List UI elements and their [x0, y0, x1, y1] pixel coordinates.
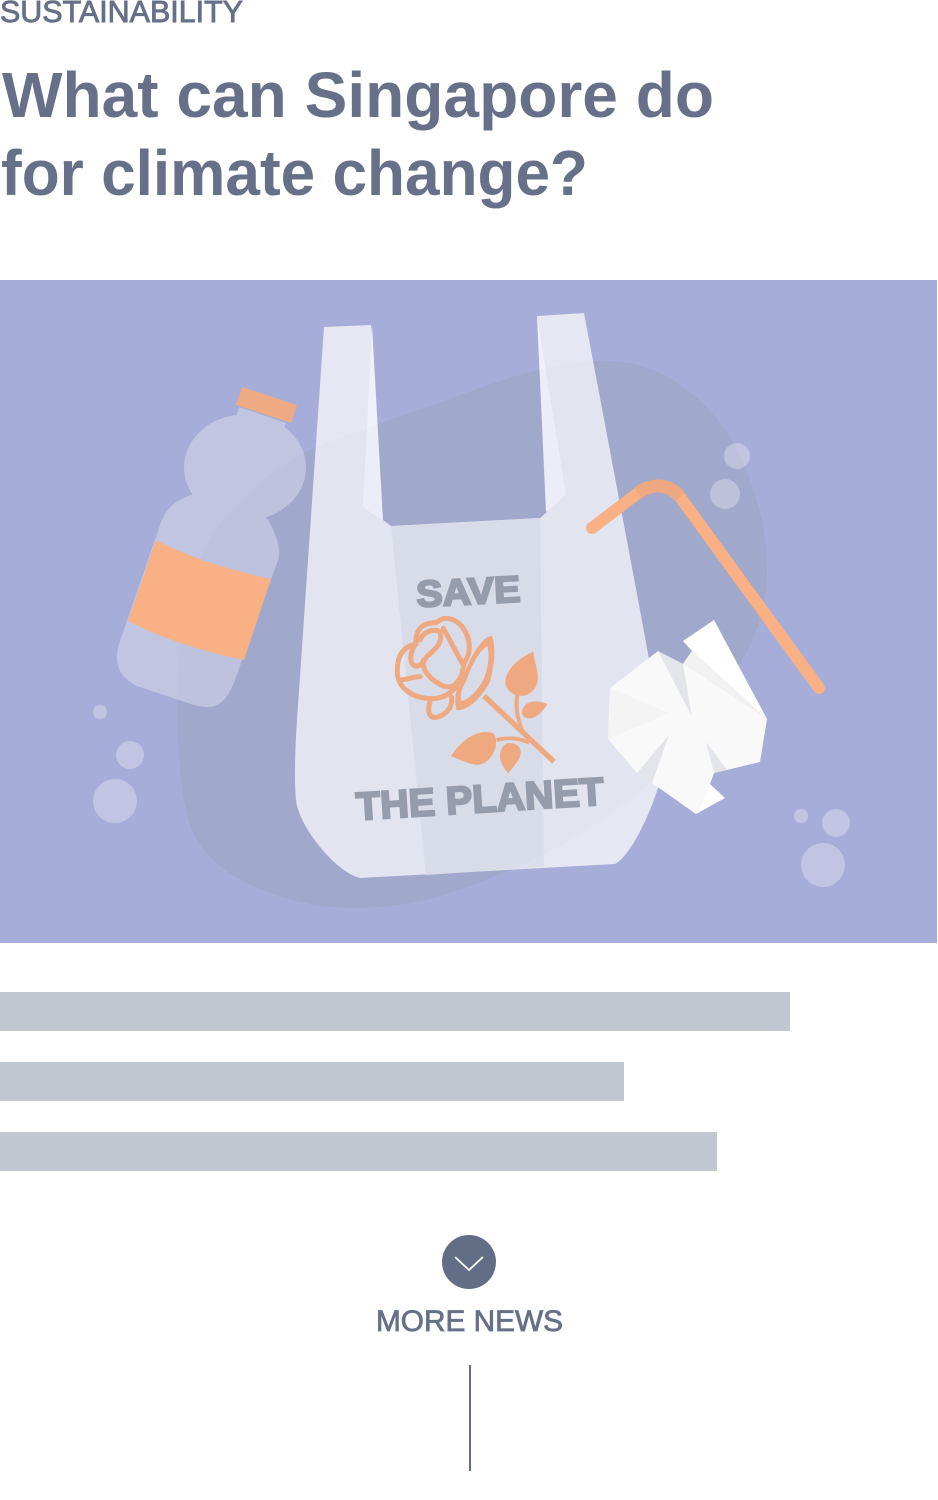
background blob: [177, 361, 767, 908]
icon: rose: [397, 618, 554, 773]
redacted text bars: [0, 992, 790, 1171]
icon: chevron down button: [442, 1235, 496, 1289]
blob shading overlay: [177, 361, 767, 908]
title: What can Singapore do: [2, 59, 714, 131]
illustration panel: [0, 280, 937, 943]
icon: crumpled tissue: [608, 620, 767, 814]
bubbles: [93, 443, 850, 887]
title: for climate change?: [1, 137, 588, 209]
more news label: MORE NEWS: [376, 1305, 563, 1338]
bottle label: [128, 540, 271, 660]
icon: plastic bottle: [117, 387, 306, 707]
icon: plastic bag: [295, 313, 663, 878]
bag text: the planet: THE PLANET: [355, 770, 605, 829]
title: [1, 59, 714, 209]
icon: drinking straw: [592, 486, 819, 688]
bag text: save: SAVE: [415, 569, 521, 615]
vertical connector line: [469, 1365, 471, 1471]
panel background: [0, 280, 937, 943]
